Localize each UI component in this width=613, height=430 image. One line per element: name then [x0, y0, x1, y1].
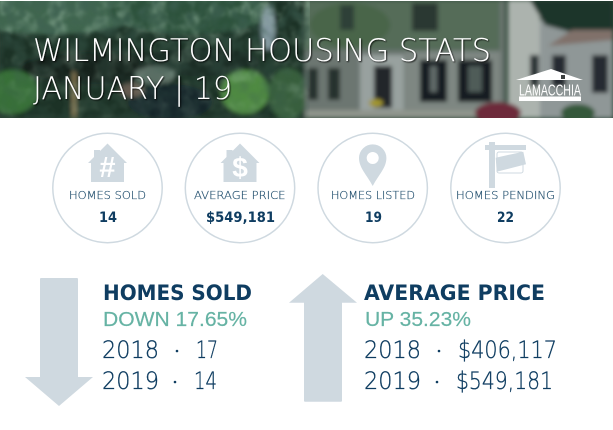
- logo: Lamacchia: LAMACCHIA: [519, 82, 581, 100]
- text block: homes sold comparison: DOWN 17.65%: [103, 308, 247, 331]
- stat: homes listed: 19: [365, 210, 382, 226]
- text block: average price comparison: $406,117: [458, 336, 557, 364]
- icon: for sale sign: [485, 142, 526, 188]
- text block: average price comparison: 2018: [364, 336, 421, 364]
- header photo banner: [0, 0, 613, 124]
- text block: average price comparison: [364, 281, 557, 395]
- stat: homes sold: 14: [99, 210, 117, 226]
- stat: average price: AVERAGE PRICE: [194, 189, 286, 202]
- text block: average price comparison: UP 35.23%: [365, 308, 471, 331]
- text block: homes sold comparison: 2018: [102, 336, 159, 364]
- title: [33, 33, 491, 107]
- facade: [305, 0, 505, 118]
- stat: homes pending: HOMES PENDING: [456, 189, 555, 202]
- stat: homes pending: 22: [497, 210, 514, 226]
- stat: homes listed: [318, 133, 427, 243]
- stat: average price: $549,181: [206, 210, 275, 226]
- arrow: up: [289, 274, 357, 402]
- text block: average price comparison: 2019: [364, 367, 421, 395]
- text block: homes sold comparison: 14: [194, 367, 217, 395]
- text block: average price comparison: $549,181: [456, 367, 553, 395]
- title: JANUARY | 19: [33, 71, 232, 107]
- icon: map pin: [359, 144, 386, 186]
- text block: homes sold comparison: HOMES SOLD: [103, 281, 252, 306]
- logo: Lamacchia: [516, 69, 583, 101]
- text block: homes sold comparison: [102, 281, 252, 395]
- text block: average price comparison: AVERAGE PRICE: [364, 281, 545, 306]
- title: WILMINGTON HOUSING STATS: [33, 33, 491, 69]
- stat: homes sold: [53, 133, 162, 243]
- text block: homes sold comparison: 2019: [102, 367, 159, 395]
- stat: average price: [185, 133, 295, 243]
- arrow: down: [25, 278, 93, 406]
- icon: house with dollar: $: [232, 152, 248, 183]
- text block: homes sold comparison: 17: [196, 336, 218, 364]
- icon: house with hash: #: [99, 152, 116, 184]
- stat: homes pending: [451, 133, 560, 243]
- stat: homes listed: HOMES LISTED: [331, 189, 415, 202]
- stat: homes sold: HOMES SOLD: [69, 189, 146, 202]
